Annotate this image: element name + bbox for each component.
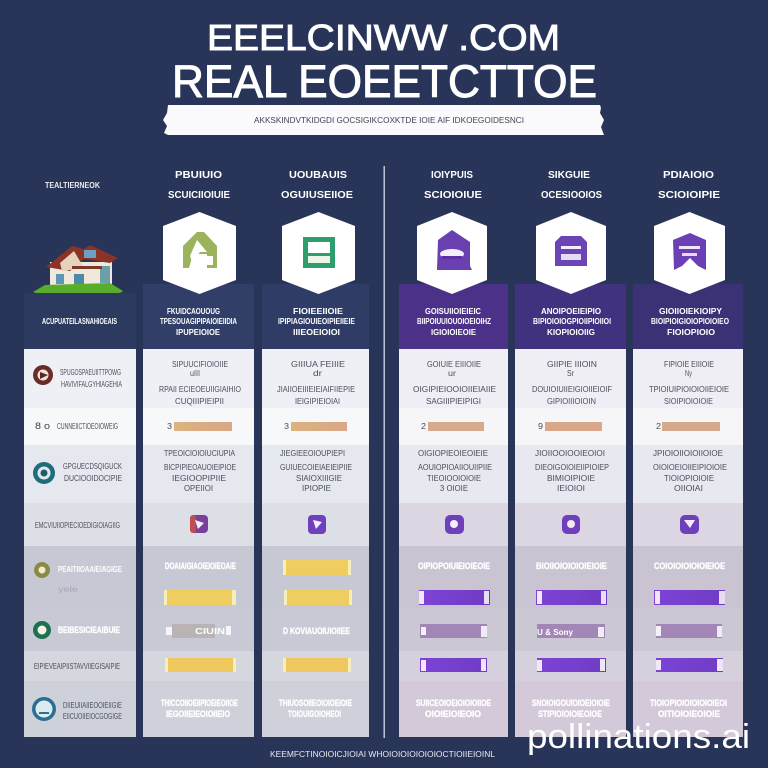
panel: option 3: BIIPOIUUIOUOIOEIOIHZ <box>417 317 491 326</box>
panel: option 5: TIOIOPIOIOIOIOIOIEOI <box>650 698 727 708</box>
icon: house <box>33 245 123 293</box>
icon: badge <box>445 515 464 534</box>
rating bar <box>174 422 232 431</box>
rating bar <box>291 422 347 431</box>
panel: option 1: IEGOIIEIEOIOIIEIO <box>166 709 230 719</box>
column heading: PDIAIOIO <box>663 170 714 181</box>
panel: row labels column: EIPIEVEAIPIISTAVVIIEGISAIPIE <box>34 662 120 671</box>
rating bar: CIUIN <box>195 627 225 636</box>
panel: option 1: IPUPEIOIOE <box>176 328 221 337</box>
panel: option 1: BICPIPIEOAUOIEIPIOE <box>164 463 236 472</box>
panel: option 2: GIIIUA FEIIIE <box>291 360 345 369</box>
panel: option 3: SAGIIIPIEIPIGI <box>426 397 481 406</box>
panel: option 3: SUIICEOIOEIOIOIOIIOE <box>416 698 491 708</box>
subtitle banner <box>163 105 604 135</box>
panel: option 4: DIEOIGOIOIEIIPIOIEP <box>535 463 609 472</box>
panel: option 2: JIEGIEEOIOUPIEPI <box>280 449 345 458</box>
divider <box>384 166 385 738</box>
rating bar <box>428 422 484 431</box>
panel: option 1: TPESOUAGIPIPAIOIEIIDIA <box>160 317 237 326</box>
panel: option 5: FIPIOIE EIIIOIE <box>664 360 714 369</box>
icon: row 6 badge <box>33 621 51 639</box>
panel: option 5: COIOIOIOIOIOIEIOE <box>654 561 725 571</box>
panel: option 2 <box>262 170 369 737</box>
rating bar <box>545 422 602 431</box>
panel: option 1: RPAII ECIEOEUIIGIAIHIO <box>159 385 241 394</box>
panel: option 2: SIAIOXIIIGIE <box>296 474 342 483</box>
panel: row labels column: BEIBESICIEAIBUIE <box>58 625 120 635</box>
icon: hexagon purple roof <box>417 212 487 294</box>
panel: option 3: OIGIPIEIOOIOIIEIAIIE <box>413 385 496 394</box>
icon: badge <box>562 515 580 534</box>
panel: option 5: SIOIPIOIOIOIE <box>664 397 713 406</box>
rating bar <box>283 658 351 672</box>
panel: option 5: TPIOIUIPIOIOIOIIEIOIE <box>649 385 729 394</box>
panel: option 3: OIPIOPOIUIEIOIEOIE <box>418 561 490 571</box>
panel: row labels column: EIICUOIIEIOCGOGIGE <box>63 712 122 721</box>
panel: option 5 <box>633 170 743 737</box>
rating bar <box>419 590 490 605</box>
panel: row labels column: DIIEUIIAIIEOOIEIIGIE <box>63 701 122 710</box>
panel: option 2: dr <box>313 369 322 378</box>
icon: badge <box>190 515 208 533</box>
icon: row 5 badge <box>34 562 50 578</box>
panel: option 5: Ny <box>685 369 692 378</box>
column heading: SIKGUIE <box>548 170 590 181</box>
rating bar <box>420 624 487 638</box>
panel: row labels column: yele <box>58 585 79 594</box>
panel: option 5: 2 <box>656 422 662 431</box>
panel: option 3: 3 OIOIE <box>440 484 468 493</box>
panel: option 1: uIII <box>190 369 200 378</box>
column heading: SCUICIIOIUIE <box>168 190 230 201</box>
panel: row labels column: EMCVIUIIOPIECIOEDIGIOIAGIIG <box>35 521 120 530</box>
panel: option 3 <box>399 170 508 737</box>
panel: option 3: TIEOIOOIOIOIE <box>427 474 481 483</box>
panel: option 5: JPIOIOIIOIOIIOIOE <box>653 449 723 458</box>
panel: option 4: GIIPIE IIIOIN <box>547 360 597 369</box>
panel: option 5: OITIOIOIEOIOIE <box>658 709 720 719</box>
panel: option 3: IGIOIOIEOIE <box>431 328 477 337</box>
panel: option 1: IEGIOOPIPIIE <box>172 474 226 483</box>
panel: row labels column: GPGUECDSQIGUCK <box>63 462 123 471</box>
panel: row labels column: DUCIOOIDOCIPIE <box>64 474 122 483</box>
rating bar: U & Sony <box>537 628 574 637</box>
panel: option 1: CUQIIIPIEIPII <box>175 397 224 406</box>
icon: row 1 badge <box>33 365 53 385</box>
watermark: pollinations.ai <box>527 718 750 756</box>
rating bar <box>164 590 236 605</box>
panel: option 5: OIIOIAI <box>674 484 703 493</box>
panel: option 2: THIUOSOIIEOIOIOEIOIE <box>279 698 352 708</box>
panel: option 1 <box>143 170 254 737</box>
title: REAL EOEETCTTOE <box>172 56 597 107</box>
panel: option 4: STIPIOIOIOIEOIOE <box>538 709 602 719</box>
panel: option 5: FIOIOPIOIO <box>667 328 715 337</box>
title <box>172 17 597 107</box>
icon: hexagon purple tray <box>536 212 606 294</box>
panel: option 1: TPEOICIOIOIUCIUPIA <box>164 449 236 458</box>
panel: option 2: IPIOPIE <box>302 484 331 493</box>
subtitle banner: AKKSKINDVTKIDGDI GOCSIGIKCOXKTDE IOIE AIF IDKOEGOIDESNCI <box>254 116 524 125</box>
column heading: SCIOIOIPIE <box>658 190 720 201</box>
column heading <box>281 170 353 201</box>
panel: row labels column <box>24 181 136 737</box>
panel: option 3: GOISUIIOIEIEIC <box>425 307 481 316</box>
icon: badge <box>680 515 699 534</box>
panel: option 3: AOUIOPIOAIIOUIIPIIE <box>418 463 492 472</box>
column heading: UOUBAUIS <box>289 170 347 181</box>
icon: row 3 badge <box>33 462 55 484</box>
panel: option 2: D KOVIAUOIUIOIIEE <box>283 626 350 636</box>
icon: hexagon purple emblem <box>654 212 725 294</box>
column heading <box>168 170 230 201</box>
rating bar <box>537 658 606 672</box>
column heading <box>658 170 720 201</box>
panel: option 4: IEIOIOI <box>557 484 585 493</box>
column heading: SCIOIOIUE <box>424 190 482 201</box>
panel: row labels column: SPUGOSPAEUIITTPOWG <box>60 368 121 377</box>
panel: option 2: TOIOUIGOIOHEOI <box>288 709 341 719</box>
column heading: OCESIOOIOS <box>541 190 602 201</box>
rating bar <box>656 658 723 672</box>
panel: option 1: FKUIDCAOUOUG <box>167 307 220 316</box>
column heading: PBUIUIO <box>175 170 222 181</box>
rating bar <box>420 658 487 672</box>
panel: option 2: JIAIIOEIIIEIEIAIFIIEPIE <box>277 385 355 394</box>
column heading: OGUIUSEIIOE <box>281 190 353 201</box>
icon: row 2 badge: 8 o <box>35 421 50 431</box>
panel: option 4: 9 <box>538 422 544 431</box>
panel: option 4: BIOIIOIOIOIOIEIOIE <box>536 561 607 571</box>
panel: option 4: KIOPIOIOIIG <box>547 328 595 337</box>
rating bar <box>656 624 722 638</box>
rating bar <box>284 590 352 605</box>
rating bar <box>654 590 725 605</box>
panel: option 5: GIOIIOIEKIOIPY <box>659 307 723 316</box>
icon: hexagon house <box>163 212 236 294</box>
rating bar <box>165 658 236 672</box>
panel: option 4: BIMIOIPIOIE <box>547 474 595 483</box>
panel: option 4: JIOIIOOIOOIEOIOI <box>535 449 605 458</box>
panel: row labels column: TEALTIERNEOK <box>45 181 100 190</box>
rating bar <box>536 590 607 605</box>
panel: option 2: IEIGIPIEIOIAI <box>295 397 340 406</box>
row backgrounds <box>24 349 136 737</box>
panel: option 2: FIOIEEIIOIE <box>293 307 344 316</box>
column heading <box>424 170 482 201</box>
panel: option 4: BIPIOIOIOGPIOIIPIOIIOI <box>533 317 611 326</box>
icon: row 8 badge <box>32 697 56 721</box>
column heading: IOIYPUIS <box>431 170 473 181</box>
rating bar <box>662 422 720 431</box>
column heading <box>541 170 602 201</box>
panel: row labels column: HAVIVIFALGYHIAGEHIA <box>61 380 122 389</box>
icon: badge <box>308 515 326 534</box>
rating bar <box>283 560 351 575</box>
panel: option 4: Sr <box>567 369 574 378</box>
footer note: KEEMFCTINOIOICJIOIAI WHOIOIOIOIOIOIOCTIOIIEIOINL <box>270 750 496 759</box>
panel: option 3: ur <box>448 369 456 378</box>
panel: option 2: IIIEOEIOIOI <box>293 328 340 337</box>
panel: option 3: OIGIOPIEOIEOIEIE <box>418 449 488 458</box>
title: EEELCINWW .COM <box>207 17 560 58</box>
panel: option 1: THICCOIIOEIIPIOEIEOIIOE <box>161 698 238 708</box>
rating bar <box>537 624 605 638</box>
panel: option 4: SNOIOIGOUIOIOEIOIOIE <box>532 698 610 708</box>
panel: option 2: 3 <box>284 422 290 431</box>
panel: option 3: GOIUIE EIIIOIIE <box>427 360 481 369</box>
panel: option 2: IPIPIAGIOUIEOIPIEIIEIE <box>278 317 356 326</box>
panel: option 2: GUIUECOIEIAEIEIPIIE <box>280 463 352 472</box>
panel: option 4: GIPIOIIIOIOIN <box>547 397 596 406</box>
panel: option 4: DOUIOIUIIEIGIOIIEIOIF <box>532 385 612 394</box>
panel: option 1: SIPUUCIFIOIOIIE <box>172 360 228 369</box>
panel: row labels column: PEAITIIOAAIEIAGIGE <box>58 565 123 574</box>
panel: option 1: DOAIAIGIAOIEIOIEOAIE <box>165 561 236 571</box>
panel: row labels column: CUNNEIICTIOEOIOWEIG <box>57 422 118 431</box>
panel: option 3: OIOIEIOIEOIO <box>425 709 481 719</box>
panel: option 1: 3 <box>167 422 173 431</box>
panel: option 3: 2 <box>421 422 427 431</box>
panel: option 4: ANOIPOEIEIPIO <box>541 307 601 316</box>
panel: option 4 <box>515 170 626 737</box>
panel: row labels column: ACUPUATEILASNAHIOEAIS <box>42 317 117 326</box>
panel: option 1: OPEIIOI <box>184 484 213 493</box>
panel: option 5: BIOIPIOIGIOIOPIOIOIEO <box>651 317 729 326</box>
rating bar <box>166 624 231 638</box>
panel: option 5: OIOIOEIOIIEIPIOIOIE <box>653 463 727 472</box>
icon: hexagon panel <box>282 212 355 294</box>
panel: option 5: TIOIOPIOIOIE <box>664 474 714 483</box>
